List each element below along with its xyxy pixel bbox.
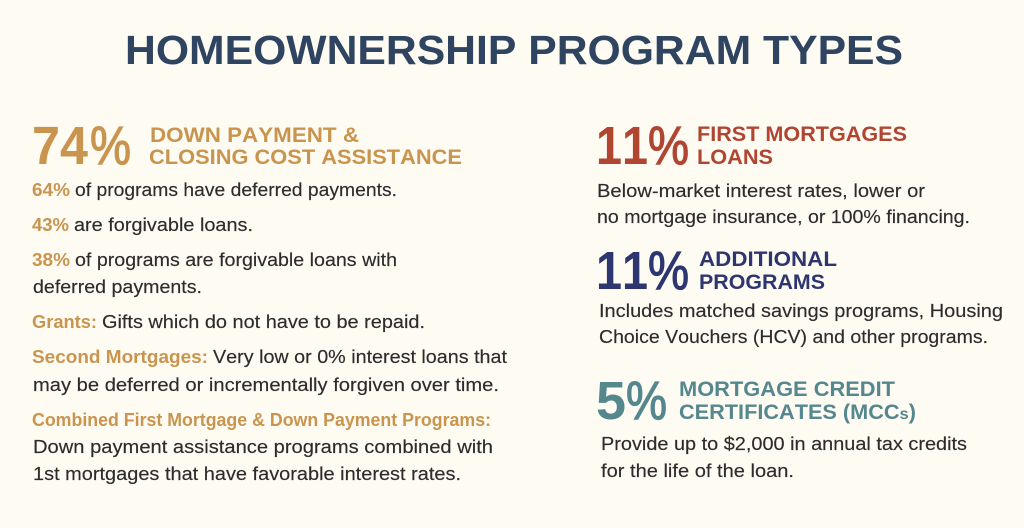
text: combined programs — [32, 409, 493, 484]
stat: 11% navy — [596, 241, 689, 301]
text: deferred payments share: of programs have deferred payments. — [75, 179, 397, 200]
text: first mortgages description: no mortgage insurance, or 100% financing. — [597, 206, 970, 227]
panel: mortgage credit certificates — [596, 371, 967, 481]
heading: first mortgages loans: FIRST MORTGAGES — [697, 123, 907, 146]
text: forgivable loans share: are forgivable loans. — [74, 214, 253, 235]
heading: mortgage credit certificates: MORTGAGE CREDIT — [679, 378, 895, 401]
text: forgivable loans with deferred payments share: of programs are forgivable loans with — [75, 249, 397, 270]
stat: 11% navy: % — [648, 241, 689, 301]
stat: 11% red — [596, 116, 689, 176]
stat: 5%: 5 — [596, 371, 626, 431]
stat: 5% — [596, 371, 667, 431]
panel: first mortgages loans — [596, 116, 970, 227]
heading: first mortgages loans — [697, 123, 907, 169]
text: second mortgages: Very low or 0% interest loans that — [213, 346, 507, 367]
stat: 74%: 74 — [32, 116, 88, 176]
text: combined programs: 1st mortgages that have favorable interest rates. — [33, 463, 461, 484]
text: forgivable loans share: 43% — [32, 214, 69, 235]
heading: down payment and closing cost assistance: DOWN PAYMENT & — [150, 124, 359, 147]
stat: 11% navy: 11 — [596, 241, 648, 301]
text: forgivable loans with deferred payments share: deferred payments. — [33, 276, 202, 297]
text: second mortgages — [32, 346, 507, 395]
text: first mortgages description: Below-market interest rates, lower or — [597, 180, 925, 201]
text: mortgage credit certificates description — [601, 433, 967, 481]
text: forgivable loans with deferred payments share: 38% — [32, 249, 70, 270]
stat: 11% red: 11 — [596, 116, 648, 176]
text: additional programs description — [599, 300, 1003, 347]
text: grants: Grants: — [32, 311, 97, 332]
title: HOMEOWNERSHIP PROGRAM TYPES — [125, 27, 903, 73]
heading: mortgage credit certificates — [679, 378, 916, 424]
text: second mortgages: may be deferred or incrementally forgiven over time. — [33, 374, 499, 395]
panel: down payment and closing cost assistance — [32, 116, 507, 484]
panel: additional programs — [596, 241, 1003, 347]
text: additional programs description: Choice Vouchers (HCV) and other programs. — [599, 326, 988, 347]
heading: down payment and closing cost assistance: CLOSING COST ASSISTANCE — [149, 146, 462, 169]
heading: mortgage credit certificates: CERTIFICATES (MCC s) — [679, 401, 916, 424]
text: mortgage credit certificates description: for the life of the loan. — [601, 460, 794, 481]
text: forgivable loans with deferred payments share — [32, 249, 397, 297]
text: combined programs: Combined First Mortgage & Down Payment Programs: — [32, 409, 491, 430]
heading: additional programs — [699, 248, 837, 294]
text: combined programs: Down payment assistance programs combined with — [33, 436, 493, 457]
stat: 11% red: % — [648, 116, 689, 176]
text: grants: Gifts which do not have to be repaid. — [102, 311, 425, 332]
text: deferred payments share: 64% — [32, 179, 70, 200]
heading: first mortgages loans: LOANS — [697, 146, 773, 169]
text: mortgage credit certificates description: Provide up to $2,000 in annual tax credits — [601, 433, 967, 454]
heading: additional programs: ADDITIONAL — [699, 248, 837, 271]
text: second mortgages: Second Mortgages: — [32, 346, 208, 367]
stat: 5%: % — [626, 371, 667, 431]
heading: additional programs: PROGRAMS — [699, 271, 825, 294]
stat: 74% — [32, 116, 131, 176]
heading: down payment and closing cost assistance — [149, 124, 462, 169]
stat: 74%: % — [90, 116, 131, 176]
text: first mortgages description — [597, 180, 970, 227]
text: additional programs description: Includes matched savings programs, Housing — [599, 300, 1003, 321]
